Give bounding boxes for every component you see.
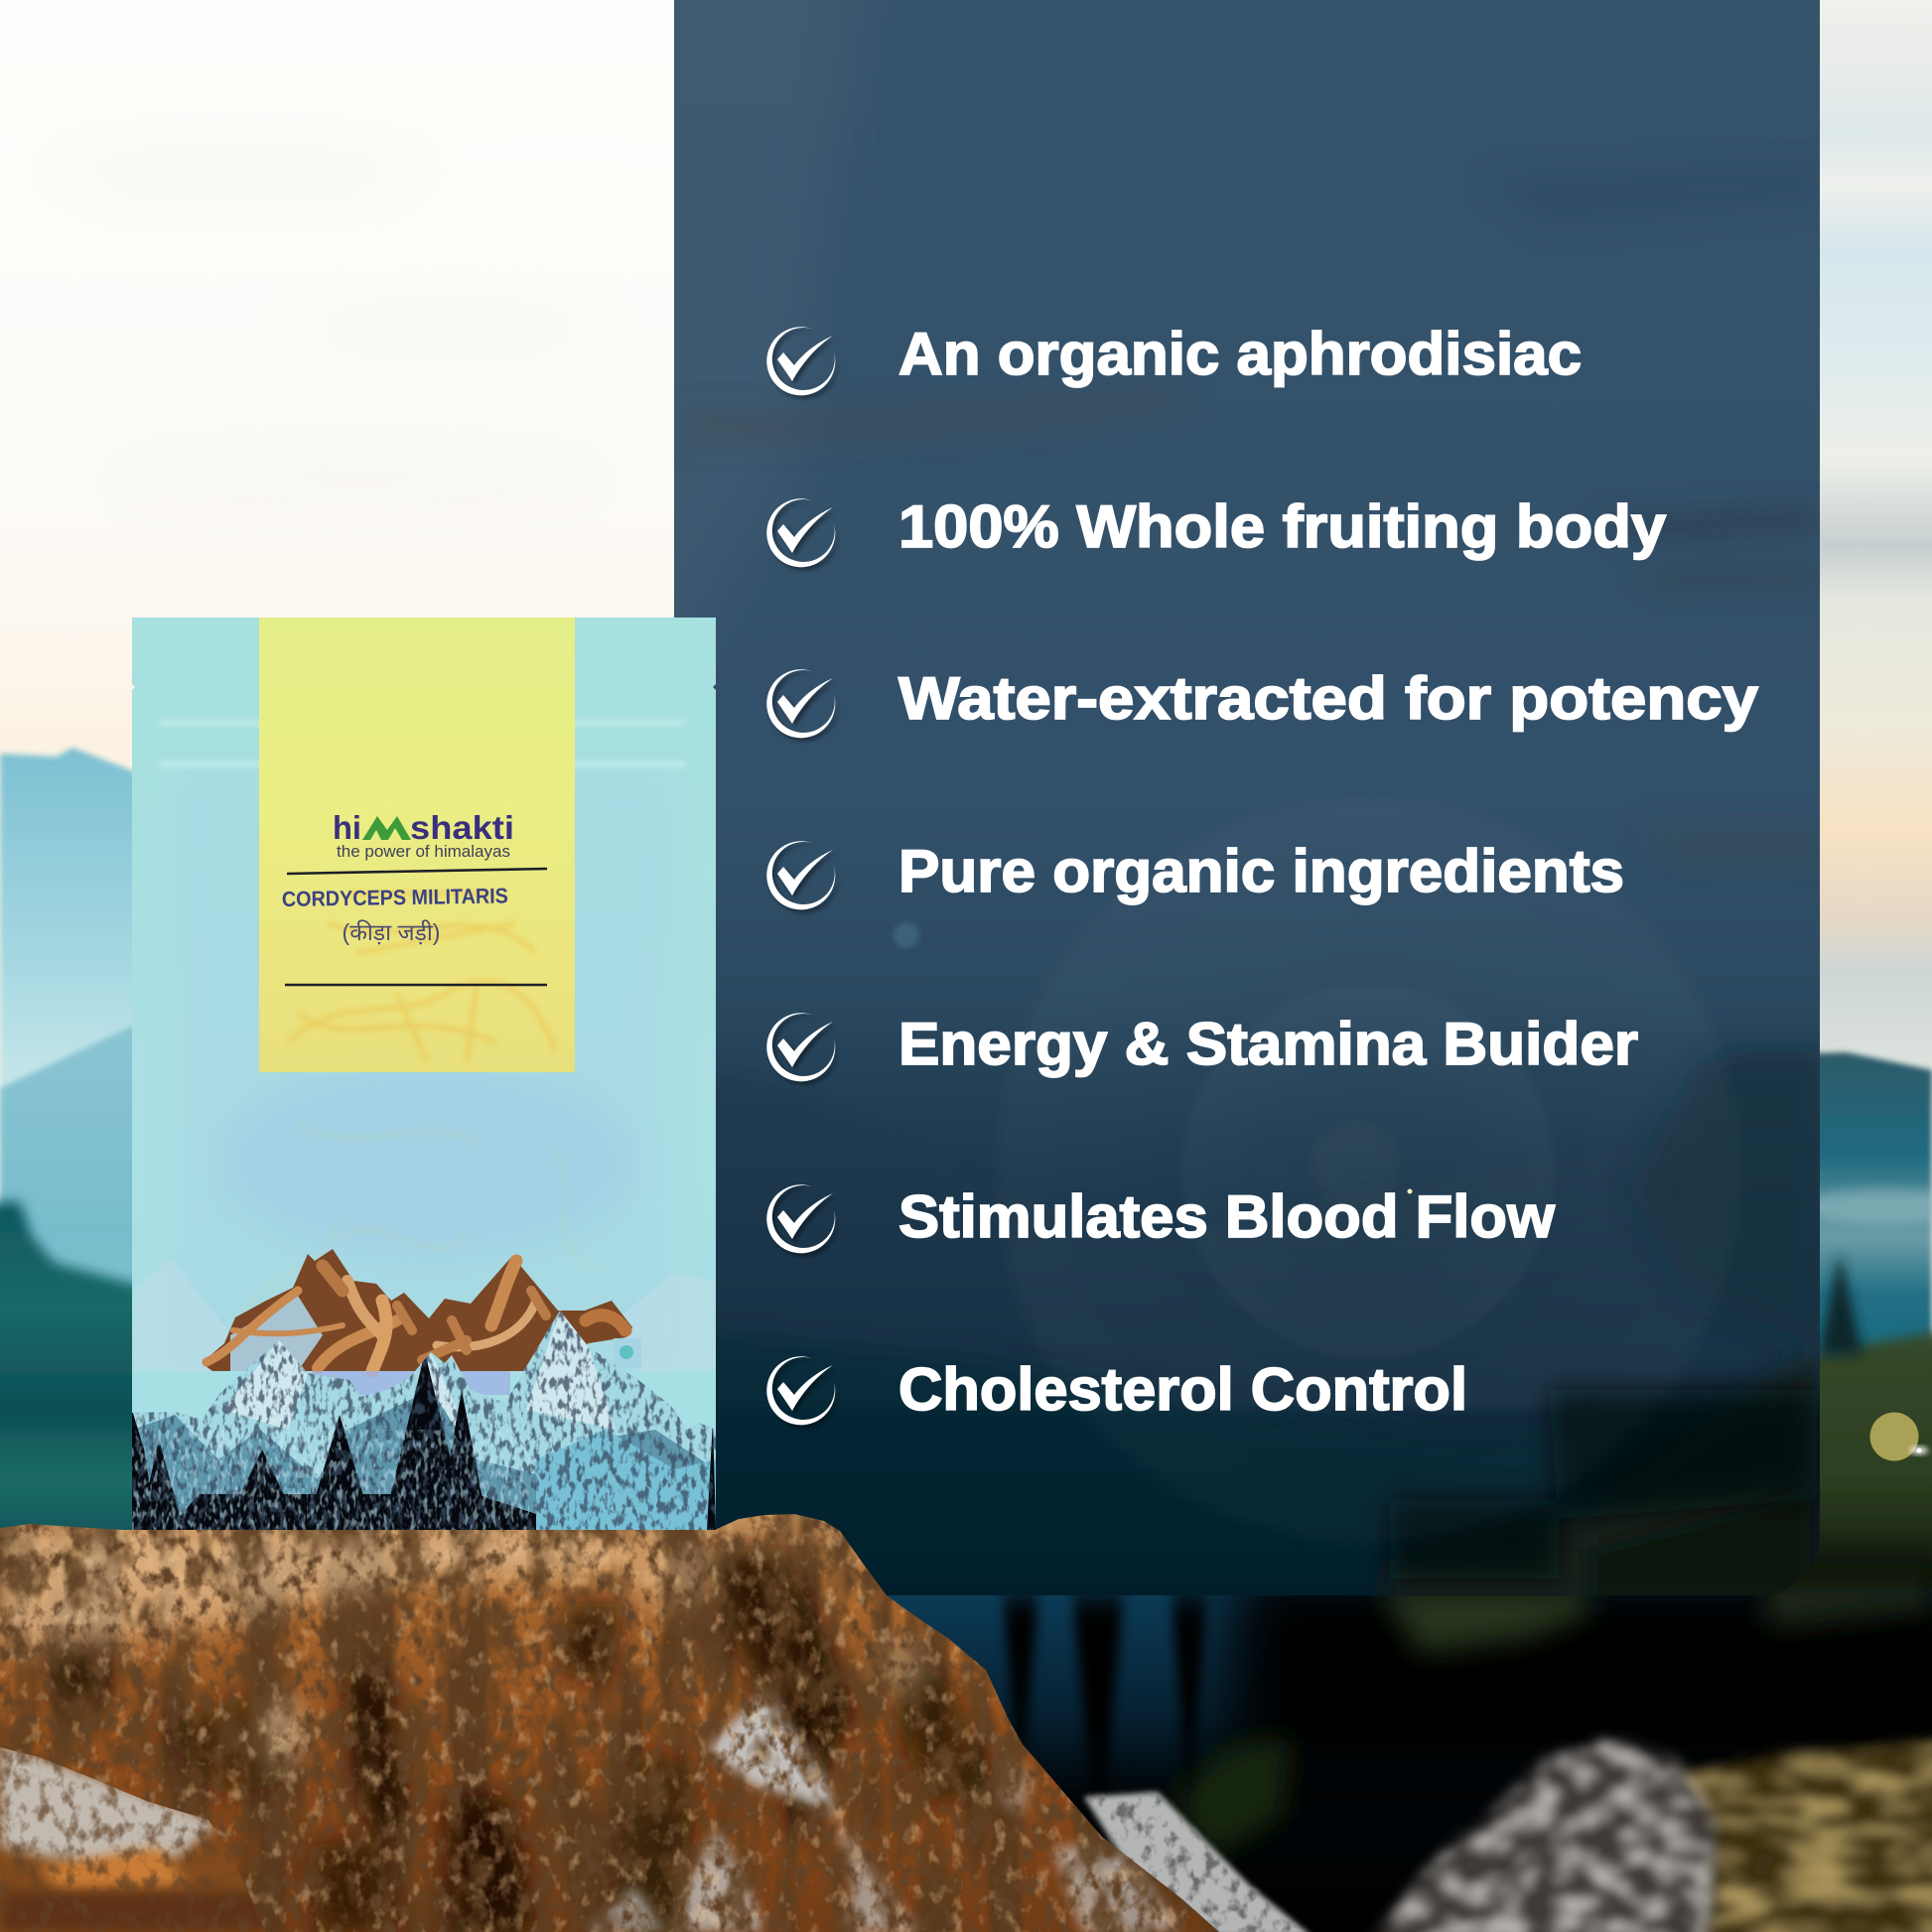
product: Himshakti pouch xyxy=(132,618,716,1534)
pouch body xyxy=(132,618,716,1403)
benefits list xyxy=(766,321,1759,1425)
pale mountain silhouettes on window xyxy=(132,1258,716,1371)
engraved texture xyxy=(132,1306,716,1534)
brand logo: hi xyxy=(333,809,361,846)
pale peak facets xyxy=(223,1311,616,1430)
tagline: the power of himalayas xyxy=(337,843,510,861)
brand logo: shakti xyxy=(410,809,514,846)
shaded ridges xyxy=(132,1390,716,1530)
rock highlights xyxy=(0,1534,922,1767)
benefit text 1: An organic aphrodisiac xyxy=(898,321,1582,387)
gap behind strands xyxy=(230,1296,323,1371)
teal-green hill left xyxy=(0,1201,199,1549)
transparent window xyxy=(216,1072,637,1314)
icon: green twin peaks xyxy=(362,816,411,840)
right foreground rocks xyxy=(1084,1739,1932,1932)
zipper seals xyxy=(159,723,685,764)
soft clouds on left sky xyxy=(40,147,616,500)
grey rock behind pedestal xyxy=(1084,1792,1311,1932)
grey rock xyxy=(1370,1739,1718,1932)
benefit text 3: Water-extracted for potency xyxy=(898,665,1759,732)
label rule bottom xyxy=(285,984,547,986)
forest below panel xyxy=(854,1588,1932,1932)
benefit text 4: Pure organic ingredients xyxy=(898,838,1624,904)
sky strip right of panel xyxy=(1767,0,1932,1092)
olive ground xyxy=(1648,1739,1932,1932)
benefit text 5: Energy & Stamina Buider xyxy=(898,1011,1638,1077)
lens flare circles in panel xyxy=(894,921,1894,1461)
cordyceps threads seen through label xyxy=(288,894,556,1062)
blurred pine trees in panel xyxy=(1390,1390,1817,1579)
blurred pine tree right xyxy=(1819,1253,1863,1355)
icon: check 6 xyxy=(766,1184,835,1253)
icon: check 5 xyxy=(766,1013,835,1081)
benefit text 6: Stimulates Blood Flow xyxy=(898,1183,1555,1250)
icon: check 2 xyxy=(766,498,835,567)
rock pedestal xyxy=(0,1509,1291,1932)
right green hill xyxy=(1767,1330,1932,1688)
mountain illustration xyxy=(132,1306,716,1534)
rock texture xyxy=(0,1521,1173,1932)
icon: check 4 xyxy=(766,841,835,909)
window print remnants xyxy=(312,1338,641,1395)
vertical rock streaks xyxy=(0,1509,1291,1932)
Hindi product name: (कीड़ा जड़ी) xyxy=(343,919,440,945)
icon: check 3 xyxy=(766,669,835,738)
grey stone patches xyxy=(586,1688,1181,1932)
pine trees xyxy=(132,1352,716,1530)
label rule top xyxy=(287,869,547,874)
icon: check 7 xyxy=(766,1356,835,1425)
icon: check 1 xyxy=(766,327,835,395)
product name: CORDYCEPS MILITARIS xyxy=(282,884,508,911)
lower-left grey boulder xyxy=(0,1737,278,1932)
dried cordyceps in mountain shape xyxy=(202,1249,632,1371)
brand logo xyxy=(333,809,514,846)
lens flare: yellow orb xyxy=(1870,1412,1928,1461)
distant mountains left xyxy=(0,748,318,1291)
yellow label xyxy=(259,618,575,1072)
blurred mountain ridges in panel xyxy=(856,1332,1791,1406)
blurred cloud streaks in panel xyxy=(689,399,1819,860)
panel: dark translucent benefits panel xyxy=(596,0,1827,1608)
bottom band xyxy=(132,1371,716,1430)
benefit text 7: Cholesterol Control xyxy=(898,1356,1467,1423)
benefit text 2: 100% Whole fruiting body xyxy=(898,493,1667,560)
right teal mountains xyxy=(1767,1052,1932,1390)
rock shading xyxy=(50,1549,993,1932)
